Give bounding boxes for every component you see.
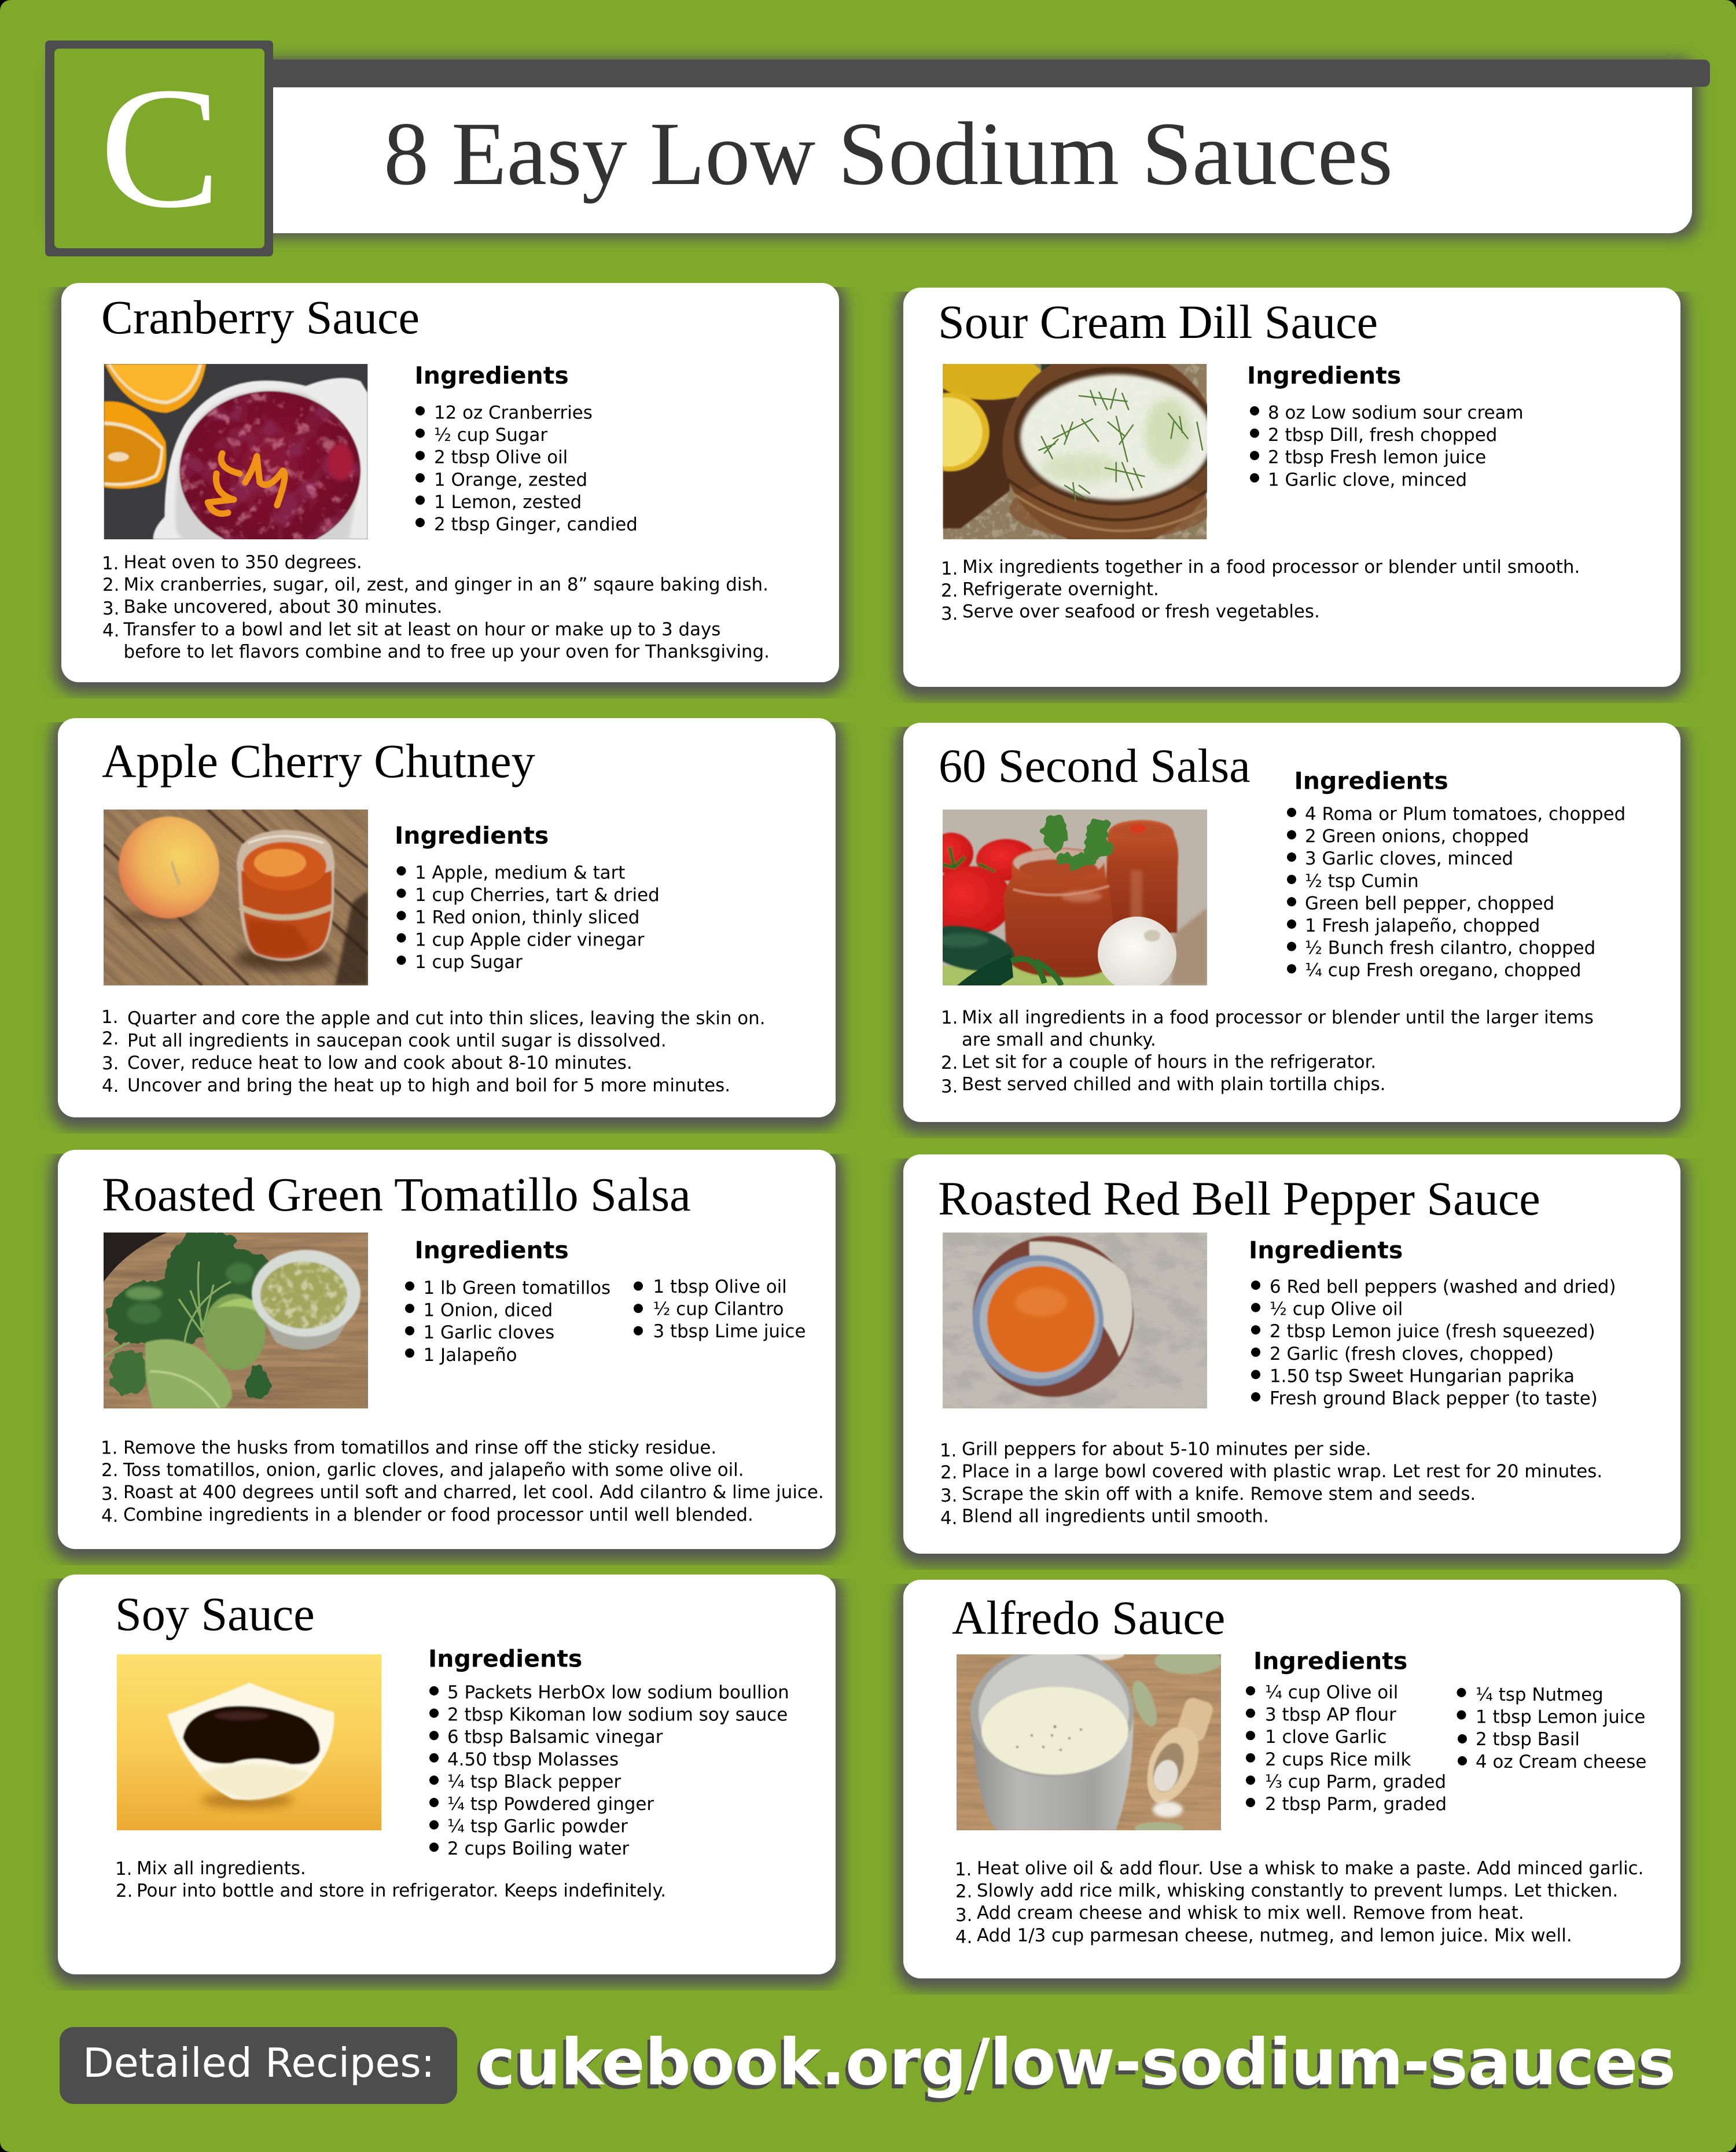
directions: Sour Cream Dill Sauce: [941, 557, 1580, 624]
ingredients: Roasted Red Bell Pepper Sauce: Fresh ground Black pepper (to taste): [1270, 1388, 1598, 1409]
directions: Roasted Red Bell Pepper Sauce: Grill peppers for about 5-10 minutes per side.: [962, 1439, 1371, 1460]
directions: Soy Sauce: Pour into bottle and store in refrigerator. Keeps indefinitely.: [137, 1881, 666, 1901]
footer url: cukebook.org/low-sodium-sauces: [475, 2029, 1673, 2104]
footer label pill: [60, 2027, 457, 2104]
ingredients: Roasted Red Bell Pepper Sauce: 1.50 tsp Sweet Hungarian paprika: [1270, 1366, 1575, 1386]
photo: tomatillos, cilantro and salsa bowl: [104, 1233, 368, 1408]
photo: alfredo sauce in metal pot with wooden scoop: [957, 1647, 1222, 1834]
ingredients: Roasted Red Bell Pepper Sauce: 2 tbsp Lemon juice (fresh squeezed): [1270, 1321, 1595, 1342]
logo badge: C: [100, 51, 221, 244]
ingredients: Apple Cherry Chutney: 1 cup Sugar: [415, 952, 523, 973]
directions: Soy Sauce: Mix all ingredients.: [137, 1858, 306, 1879]
ingredients: Roasted Green Tomatillo Salsa: Ingredients: [414, 1236, 569, 1264]
directions: Alfredo Sauce: Slowly add rice milk, whisking constantly to prevent lumps. Let thicken.: [977, 1881, 1618, 1901]
heading: Roasted Red Bell Pepper Sauce: Roasted Red Bell Pepper Sauce: [938, 1172, 1540, 1225]
directions: Roasted Red Bell Pepper Sauce: 3.: [940, 1485, 957, 1506]
directions: Roasted Green Tomatillo Salsa: Toss tomatillos, onion, garlic cloves, and jalapeño with some olive oil.: [123, 1460, 744, 1481]
directions: Cranberry Sauce: 1.: [102, 553, 119, 574]
header white panel: [273, 87, 1692, 233]
ingredients: Sour Cream Dill Sauce: 8 oz Low sodium sour cream: [1268, 403, 1524, 424]
ingredients: Roasted Red Bell Pepper Sauce: Ingredients: [1249, 1236, 1403, 1264]
directions: Cranberry Sauce: 4.: [102, 620, 119, 641]
cilantro: [108, 1231, 274, 1400]
panel: Alfredo Sauce: [896, 1577, 1687, 1990]
ingredients: Alfredo Sauce: 2 tbsp Basil: [1476, 1729, 1580, 1750]
header: [45, 41, 1710, 256]
title: 8 Easy Low Sodium Sauces: [384, 104, 1393, 204]
directions: Apple Cherry Chutney: Quarter and core the apple and cut into thin slices, leaving the skin on.: [127, 1008, 766, 1029]
directions: Apple Cherry Chutney: 3.: [102, 1053, 119, 1074]
ingredients: 60 Second Salsa: 2 Green onions, chopped: [1305, 826, 1529, 847]
directions: Roasted Green Tomatillo Salsa: [101, 1437, 824, 1526]
ingredients: Alfredo Sauce: 2 cups Rice milk: [1265, 1749, 1411, 1770]
photo: cranberry sauce in white dish with oranges: [104, 364, 368, 539]
directions: Roasted Green Tomatillo Salsa: 2.: [101, 1460, 118, 1481]
directions: Cranberry Sauce: Mix cranberries, sugar, oil, zest, and ginger in an 8” sqaure baking dish.: [124, 575, 768, 595]
photo: soy sauce in white bowl on yellow mat: [117, 1654, 381, 1830]
ingredients: Alfredo Sauce: Ingredients: [1253, 1647, 1407, 1675]
front jar: [1004, 848, 1113, 977]
photo: sour cream dill sauce in wooden bowl: [943, 364, 1207, 539]
directions: Sour Cream Dill Sauce: Mix ingredients together in a food processor or blender until smooth.: [962, 557, 1580, 577]
ingredients: Apple Cherry Chutney: 1 Red onion, thinly sliced: [415, 907, 639, 928]
ingredients: Roasted Green Tomatillo Salsa: 3 tbsp Lime juice: [653, 1321, 806, 1342]
directions: Alfredo Sauce: Add 1/3 cup parmesan cheese, nutmeg, and lemon juice. Mix well.: [977, 1925, 1572, 1946]
ingredients: Alfredo Sauce: 4 oz Cream cheese: [1476, 1752, 1646, 1772]
panel: Cranberry Sauce: [54, 281, 846, 694]
directions: 60 Second Salsa: Best served chilled and with plain tortilla chips.: [962, 1074, 1385, 1095]
directions: Roasted Green Tomatillo Salsa: 3.: [101, 1484, 118, 1504]
ingredients: 60 Second Salsa: 3 Garlic cloves, minced: [1305, 848, 1513, 869]
heading: Apple Cherry Chutney: Apple Cherry Chutney: [102, 735, 535, 788]
header dark bar: [255, 60, 1710, 87]
directions: Alfredo Sauce: 2.: [955, 1881, 972, 1902]
directions: Soy Sauce: 2.: [116, 1881, 133, 1901]
directions: Roasted Red Bell Pepper Sauce: Scrape the skin off with a knife. Remove stem and seeds.: [962, 1484, 1476, 1504]
ingredients: Alfredo Sauce: 2 tbsp Parm, graded: [1265, 1794, 1447, 1815]
ingredients: Apple Cherry Chutney: 1 cup Apple cider vinegar: [415, 929, 645, 950]
ingredients: Roasted Green Tomatillo Salsa: 1 Onion, diced: [424, 1300, 553, 1321]
directions: Alfredo Sauce: Heat olive oil & add flour. Use a whisk to make a paste. Add minced garlic.: [977, 1858, 1643, 1879]
directions: Apple Cherry Chutney: Cover, reduce heat to low and cook about 8-10 minutes.: [127, 1053, 632, 1073]
rear jar: [1105, 820, 1178, 933]
directions: Sour Cream Dill Sauce: 1.: [941, 558, 958, 579]
directions: Soy Sauce: [115, 1858, 666, 1901]
panel: Soy Sauce: [51, 1572, 843, 1986]
directions: Apple Cherry Chutney: [101, 1007, 766, 1097]
directions: Sour Cream Dill Sauce: Serve over seafood or fresh vegetables.: [962, 601, 1320, 622]
ingredients: Sour Cream Dill Sauce: 2 tbsp Fresh lemon juice: [1268, 447, 1486, 468]
directions: Soy Sauce: 1.: [115, 1859, 132, 1879]
tomatillos: [203, 1294, 266, 1370]
logo badge: [45, 41, 273, 256]
ingredients: 60 Second Salsa: [1287, 767, 1625, 981]
ingredients: Cranberry Sauce: 2 tbsp Ginger, candied: [434, 514, 638, 535]
heading: Soy Sauce: Soy Sauce: [115, 1588, 315, 1640]
ingredients: Soy Sauce: ¼ tsp Garlic powder: [447, 1816, 628, 1837]
ingredients: Cranberry Sauce: 1 Orange, zested: [434, 469, 587, 490]
heading: Alfredo Sauce: Alfredo Sauce: [952, 1591, 1225, 1645]
directions: Cranberry Sauce: Bake uncovered, about 30 minutes.: [124, 597, 442, 617]
cilantro garnish: [1042, 816, 1110, 867]
ingredients: Sour Cream Dill Sauce: 1 Garlic clove, minced: [1268, 469, 1467, 490]
garlic: [1098, 917, 1176, 992]
directions: Apple Cherry Chutney: Put all ingredients in saucepan cook until sugar is dissolved.: [127, 1031, 667, 1051]
ingredients: Apple Cherry Chutney: 1 cup Cherries, tart & dried: [415, 885, 660, 906]
ingredients: Alfredo Sauce: ¼ cup Olive oil: [1265, 1682, 1398, 1703]
directions: Cranberry Sauce: [102, 552, 770, 662]
panel: Roasted Red Bell Pepper Sauce: [896, 1152, 1687, 1565]
ingredients: Roasted Green Tomatillo Salsa: 1 Garlic cloves: [424, 1322, 554, 1343]
ingredients: Roasted Green Tomatillo Salsa: 1 lb Green tomatillos: [424, 1278, 610, 1298]
directions: Roasted Red Bell Pepper Sauce: 1.: [940, 1440, 957, 1461]
photo: apple and jar of chutney on wood: [104, 810, 368, 985]
directions: 60 Second Salsa: 2.: [941, 1053, 958, 1073]
directions: Alfredo Sauce: [955, 1858, 1643, 1948]
ingredients: Soy Sauce: 4.50 tbsp Molasses: [447, 1749, 619, 1770]
ingredients: Alfredo Sauce: ¼ tsp Nutmeg: [1476, 1684, 1603, 1705]
directions: Sour Cream Dill Sauce: 3.: [941, 604, 958, 624]
heading: Cranberry Sauce: Cranberry Sauce: [101, 291, 420, 344]
directions: Roasted Red Bell Pepper Sauce: [940, 1439, 1602, 1529]
directions: 60 Second Salsa: Let sit for a couple of hours in the refrigerator.: [962, 1052, 1376, 1073]
ingredients: Alfredo Sauce: 3 tbsp AP flour: [1265, 1705, 1396, 1726]
directions: Roasted Green Tomatillo Salsa: Roast at 400 degrees until soft and charred, let cool. Add cilantro & lime juice.: [123, 1482, 824, 1503]
directions: 60 Second Salsa: 3.: [941, 1076, 958, 1097]
directions: Sour Cream Dill Sauce: 2.: [941, 580, 958, 601]
ingredients: Sour Cream Dill Sauce: [1247, 362, 1524, 490]
directions: Cranberry Sauce: before to let flavors combine and to free up your oven for Thanksgiving.: [124, 641, 770, 662]
ingredients: Alfredo Sauce: [1246, 1647, 1646, 1815]
ingredients: 60 Second Salsa: ½ Bunch fresh cilantro, chopped: [1305, 938, 1595, 959]
ingredients: Roasted Green Tomatillo Salsa: [405, 1236, 806, 1366]
ingredients: Apple Cherry Chutney: Ingredients: [395, 822, 549, 849]
footer label pill: Detailed Recipes:: [83, 2040, 435, 2087]
directions: Cranberry Sauce: Transfer to a bowl and let sit at least on hour or make up to 3 days: [123, 619, 720, 640]
directions: Roasted Red Bell Pepper Sauce: 4.: [940, 1508, 957, 1529]
ingredients: Cranberry Sauce: ½ cup Sugar: [434, 425, 547, 446]
ingredients: Cranberry Sauce: 12 oz Cranberries: [434, 403, 593, 424]
ingredients: Roasted Red Bell Pepper Sauce: ½ cup Olive oil: [1270, 1299, 1403, 1320]
heading: Roasted Green Tomatillo Salsa: Roasted Green Tomatillo Salsa: [102, 1168, 691, 1221]
ingredients: Roasted Green Tomatillo Salsa: 1 Jalapeño: [424, 1345, 517, 1366]
directions: 60 Second Salsa: are small and chunky.: [962, 1029, 1156, 1050]
panel: Roasted Green Tomatillo Salsa: [51, 1147, 843, 1561]
footer: [60, 2025, 1676, 2104]
directions: Cranberry Sauce: Heat oven to 350 degrees.: [124, 552, 362, 573]
ingredients: Roasted Green Tomatillo Salsa: 1 tbsp Olive oil: [653, 1277, 787, 1297]
ingredients: 60 Second Salsa: Ingredients: [1294, 767, 1448, 795]
ingredients: Soy Sauce: Ingredients: [428, 1645, 582, 1673]
ingredients: Roasted Red Bell Pepper Sauce: 2 Garlic (fresh cloves, chopped): [1270, 1344, 1554, 1364]
directions: Alfredo Sauce: 3.: [955, 1905, 972, 1926]
ingredients: Sour Cream Dill Sauce: Ingredients: [1247, 362, 1401, 389]
photo: red pepper sauce in blue bowl on marble: [943, 1233, 1207, 1408]
directions: Alfredo Sauce: Add cream cheese and whisk to mix well. Remove from heat.: [977, 1903, 1524, 1923]
directions: Alfredo Sauce: 1.: [955, 1859, 972, 1880]
directions: Cranberry Sauce: 2.: [102, 575, 119, 595]
photo: jars of salsa with tomatoes, peppers, garlic: [943, 810, 1207, 985]
ingredients: Alfredo Sauce: 1 clove Garlic: [1265, 1727, 1387, 1748]
ingredients: Soy Sauce: 6 tbsp Balsamic vinegar: [447, 1727, 663, 1748]
directions: Apple Cherry Chutney: 2.: [102, 1028, 119, 1049]
ingredients: 60 Second Salsa: 4 Roma or Plum tomatoes, chopped: [1305, 804, 1625, 825]
heading: 60 Second Salsa: 60 Second Salsa: [939, 740, 1250, 792]
directions: Roasted Green Tomatillo Salsa: Combine ingredients in a blender or food processor until well blended.: [123, 1504, 753, 1525]
directions: 60 Second Salsa: Mix all ingredients in a food processor or blender until the larger items: [962, 1007, 1594, 1028]
peppers: [919, 918, 1018, 978]
ingredients: Roasted Green Tomatillo Salsa: ½ cup Cilantro: [653, 1299, 784, 1320]
directions: Cranberry Sauce: 3.: [102, 598, 119, 619]
directions: Roasted Red Bell Pepper Sauce: 2.: [940, 1462, 957, 1483]
directions: Roasted Green Tomatillo Salsa: 4.: [101, 1506, 118, 1526]
ingredients: Soy Sauce: 2 cups Boiling water: [447, 1838, 630, 1859]
directions: Roasted Red Bell Pepper Sauce: Blend all ingredients until smooth.: [962, 1506, 1269, 1526]
salsa bowl: [260, 1314, 352, 1350]
directions: Roasted Red Bell Pepper Sauce: Place in a large bowl covered with plastic wrap. Let rest for 20 minutes.: [962, 1461, 1602, 1482]
footer url: cukebook.org/low-sodium-sauces: [477, 2025, 1676, 2100]
ingredients: Cranberry Sauce: [414, 362, 638, 535]
ingredients: Alfredo Sauce: ⅓ cup Parm, graded: [1265, 1771, 1446, 1792]
directions: Roasted Green Tomatillo Salsa: Remove the husks from tomatillos and rinse off the sticky residue.: [123, 1437, 716, 1458]
ingredients: 60 Second Salsa: 1 Fresh jalapeño, chopped: [1305, 915, 1540, 936]
directions: Alfredo Sauce: 4.: [955, 1927, 972, 1948]
ingredients: Cranberry Sauce: 2 tbsp Olive oil: [434, 447, 568, 468]
directions: 60 Second Salsa: [941, 1007, 1594, 1097]
ingredients: Roasted Red Bell Pepper Sauce: [1249, 1236, 1616, 1409]
ingredients: Apple Cherry Chutney: 1 Apple, medium & tart: [415, 862, 625, 883]
ingredients: Cranberry Sauce: 1 Lemon, zested: [434, 492, 582, 513]
ingredients: Apple Cherry Chutney: [395, 822, 660, 973]
heading: Sour Cream Dill Sauce: Sour Cream Dill Sauce: [938, 296, 1378, 348]
ingredients: 60 Second Salsa: Green bell pepper, chopped: [1305, 893, 1554, 914]
ingredients: Sour Cream Dill Sauce: 2 tbsp Dill, fresh chopped: [1268, 425, 1497, 446]
ingredients: Cranberry Sauce: Ingredients: [414, 362, 569, 389]
ingredients: 60 Second Salsa: ¼ cup Fresh oregano, chopped: [1305, 960, 1581, 981]
panel: Sour Cream Dill Sauce: [896, 285, 1687, 698]
ingredients: Soy Sauce: ¼ tsp Powdered ginger: [447, 1794, 654, 1815]
directions: Apple Cherry Chutney: 4.: [102, 1076, 119, 1097]
ingredients: Alfredo Sauce: 1 tbsp Lemon juice: [1476, 1707, 1645, 1728]
ingredients: Soy Sauce: 5 Packets HerbOx low sodium boullion: [447, 1682, 789, 1703]
ingredients: Soy Sauce: ¼ tsp Black pepper: [447, 1771, 621, 1792]
panel: 60 Second Salsa: [896, 720, 1687, 1134]
directions: Roasted Green Tomatillo Salsa: 1.: [101, 1438, 117, 1459]
panel: Apple Cherry Chutney: [42, 718, 851, 1134]
directions: Apple Cherry Chutney: 1.: [101, 1007, 118, 1028]
directions: Apple Cherry Chutney: Uncover and bring the heat up to high and boil for 5 more minutes.: [127, 1075, 730, 1096]
directions: Sour Cream Dill Sauce: Refrigerate overnight.: [962, 579, 1159, 600]
ingredients: Soy Sauce: 2 tbsp Kikoman low sodium soy sauce: [447, 1705, 788, 1726]
ingredients: Soy Sauce: [428, 1645, 789, 1859]
ingredients: Roasted Red Bell Pepper Sauce: 6 Red bell peppers (washed and dried): [1270, 1277, 1616, 1297]
directions: 60 Second Salsa: 1.: [941, 1007, 958, 1028]
ingredients: 60 Second Salsa: ½ tsp Cumin: [1305, 871, 1419, 892]
